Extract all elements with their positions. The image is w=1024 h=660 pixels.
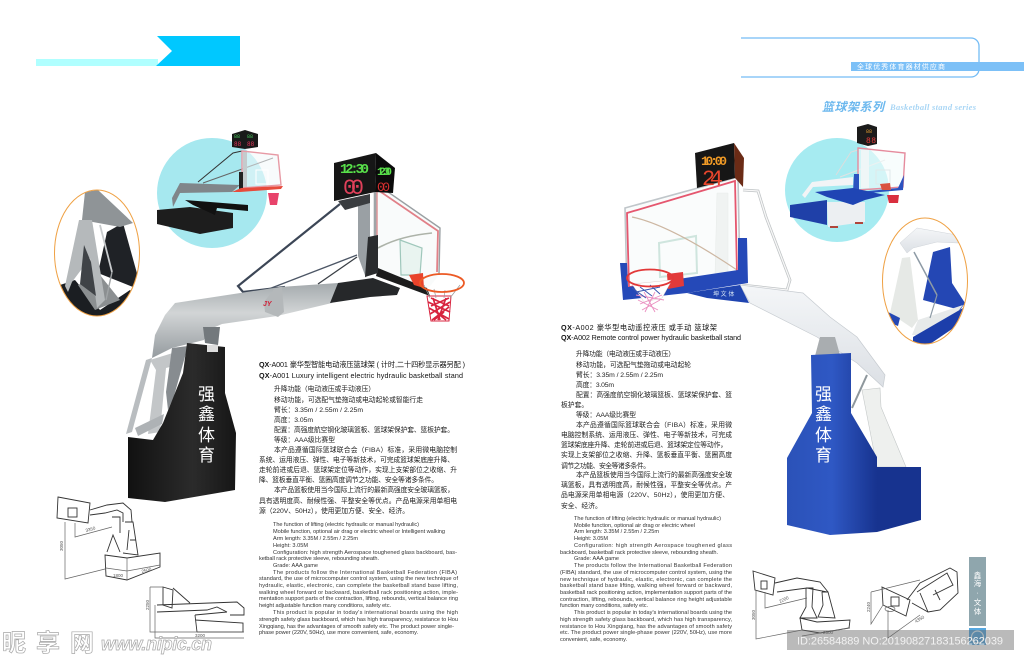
A001 Chinese description: 臂长：3.35m / 2.55m / 2.25m [274,405,363,414]
A002 English description: new technique of hydraulic, elastic, electronic, can complete the [560,577,732,583]
A001 English description: Height: 3.05M [273,543,308,549]
brand text on column [198,385,215,465]
backboard [625,177,740,293]
A001 English description: The function of lifting (electric hydraulic or manual hydraulic) [273,522,419,528]
product A001 text [258,360,465,636]
side tab [969,557,986,645]
inset: blue stand folded on cyan circle [785,124,905,242]
A001 Chinese description: 源（220V、50Hz），使用更加方便、安全、经济。 [259,506,409,515]
A002 English description: basketball stand base lifting, walking wheel forward or backward, [560,583,732,589]
A002 English description: Arm length: 3.35M / 2.55m / 2.25m [574,529,659,535]
blue wedge with text: 坤 文 体 [713,290,734,298]
scoreboard [695,143,744,192]
black cover [330,278,400,303]
A002 English description: The products follow the International Basketball Federation [574,563,732,569]
A002 English description: Configuration: high strength Aerospace toughened glass [574,543,732,549]
A001 Chinese description: 配置：高强度航空钢化玻璃篮板、篮球架保护套、篮板护套。 [274,425,454,434]
A001 Chinese description: 降、篮板垂直平衡、篮圈高度调节之功能、安全等诸多条件。 [259,475,438,484]
brand text on column: 育 [198,446,215,465]
A001 English description: phase power (220V, 50Hz), use more convenient, safe, economy. [259,630,418,636]
backboard [375,183,440,296]
brand text on column: 体 [198,426,215,445]
A001 English description: mentation support parts of the contraction, lifting, rebounds, vertical balance ring [259,596,458,602]
A001 English description: strength safety glass backboard, which has high transparency, resistance to Hou [259,617,458,623]
A001 English description: This product is popular in today's international boards using the high [273,610,458,616]
brand text on column: 体 [815,426,832,445]
header: rounded frame and slogan band [741,38,1024,77]
brand text on column: 鑫 [198,405,215,424]
A001 Chinese description: 升降功能（电动液压或手动液压） [274,384,375,393]
arm logo: JY [263,301,273,308]
hoop and net [409,273,464,321]
A002 Chinese description: 本产品遵循国际篮球联合会（FIBA）标准，采用微 [576,420,732,429]
scoreboard: 00 [377,180,390,195]
slogan text: 全球优秀体育器材供应商 [857,62,945,71]
technical drawing: blue stand perspective: 2200 [778,595,790,604]
hoop and net [627,270,684,312]
scoreboard: 12:30 [340,162,369,178]
A001 English description: Xingqiang, has the advantages of smooth safety etc. The product power single- [259,624,454,630]
A002 Chinese description: 璃篮板，具有透明度高，耐候性强，平整安全等优点。产 [561,480,732,489]
product A002 text [560,323,741,643]
A002 Chinese description: 等级：AAA级比赛型 [576,410,636,419]
A002 English description: This product is popular in today's international boards using the [574,610,732,616]
A001 Chinese description: 移动功能，可选配气垫拖动或电动起轮或智能行走 [274,395,423,404]
A001 titles: QX-A001 豪华型智能电动液压篮球架 ( 计时,二十四秒显示器另配 ) [259,360,465,369]
technical drawing: black stand perspective: 2500 [141,566,152,574]
A002 titles [561,323,741,342]
white post [715,193,728,275]
header: cyan arrow band [36,36,240,66]
inset: blue stand folded on cyan circle: 88 [866,137,876,146]
main product: black stand QX-A001 [126,153,464,502]
technical drawing: blue stand folded: 2240 [866,601,871,612]
scoreboard: 12:30 [377,167,392,179]
blue padded column [787,353,877,535]
technical drawing: blue stand perspective: 3050 [751,609,756,620]
brand text on column: 强 [815,385,832,404]
A001 English description: hydraulic, elastic, electronic, can complete the basketball stand base lifting, [259,583,458,589]
technical drawing: black stand perspective: 3050 [59,540,64,551]
series heading: Basketball stand series [889,102,977,112]
brand text on column: 强 [198,385,215,404]
A002 English description: The function of lifting (electric hydraulic or manual hydraulic) [574,516,721,522]
brand text on column [815,385,832,465]
A002 English description: contraction, lifting, rebounds, vertical balance ring height adjustable [560,597,732,603]
inset: black stand folded on cyan circle [157,130,283,248]
white frame [862,388,906,467]
scoreboard [334,153,395,210]
A002 Chinese description: 篮球架底座升降、走轮前进或后退、篮球架定位等动作， [561,440,727,449]
watermark: image id: ID:26584889 NO:20190827183156262039 [797,636,1003,648]
arm support [815,337,840,356]
technical drawing: blue stand folded: 4350 [914,614,926,624]
scoreboard: 24 [702,167,723,192]
technical drawing: black stand side view: 3200 [195,633,206,638]
technical drawing: blue stand perspective: 2500 [823,630,834,635]
A001 Chinese description: 高度：3.05m [274,415,313,424]
scoreboard: 10:00 [701,154,727,169]
white arm [740,285,885,387]
braces [238,204,432,292]
side tab: · [976,588,979,597]
A001 English description: The products follow the International Basketball Federation (FIBA) [273,570,457,576]
watermark: image id [787,630,1014,650]
watermark: site name [2,630,212,657]
main product: blue stand QX-A002 [620,143,921,535]
A002 Chinese description: 电脑控制系统、运用液压、弹性、电子等新技术，可完成 [561,430,732,439]
technical drawing: blue stand perspective [751,571,850,639]
A001 titles: QX-A001 Luxury intelligent electric hydraulic basketball stand [259,371,463,380]
A002 English description: high strength safety glass backboard, which has high transparency, [560,617,732,623]
A001 English description: walking wheel forward or backward, basketball rack positioning action, imple- [258,590,458,596]
A001 Chinese description: 本产品遵循国际篮球联合会（FIBA）标准，采用微电脑控制 [274,445,457,454]
side tab: 鑫 [974,570,982,580]
inset: blue stand folded on cyan circle: 88 [866,129,872,135]
A002 Chinese description: 安全、经济。 [561,501,602,510]
technical drawing: black stand side view: 2250 [145,599,150,610]
inset: black stand folded on cyan circle: 88 [234,141,242,148]
A001 titles [259,360,465,380]
brand text on column: 育 [815,446,832,465]
A001 English description [258,522,458,636]
side tab: 海 [974,578,982,588]
A002 Chinese description: 升降功能（电动液压或手动液压） [576,349,675,358]
A001 Chinese description: 等级：AAA级比赛型 [274,435,335,444]
A001 English description: Grade: AAA game [273,563,318,569]
scoreboard: 00 [343,176,364,201]
A002 Chinese description: 移动功能，可选配气垫拖动或电动起轮 [576,360,691,369]
A002 English description: basketball rack positioning action, implementation support parts of the [560,590,732,596]
A001 Chinese description: 本产品篮板使用当今国际上流行的最新高强度安全玻璃篮板， [274,485,454,494]
A002 English description: Grade: AAA game [574,556,619,562]
rear base [877,467,921,532]
A002 English description: Mobile function, optional air drag or electric wheel [574,523,695,529]
A001 English description: Configuration: high strength Aerospace toughened glass backboard, bas- [273,550,457,556]
technical drawing: black stand side view [145,587,244,638]
technical drawing: blue stand folded [866,568,958,638]
A002 English description: resistance to Hou Xingqiang, has the advantages of smooth safety [560,624,732,630]
A002 Chinese description: 配置：高强度航空钢化玻璃篮板、篮球架保护套、篮 [576,390,732,399]
blue wedge with text [687,285,749,303]
blue backboard pad [620,238,748,300]
A001 English description: height adjustable function many conditions, safety etc. [259,603,391,609]
brand text on column: 鑫 [815,405,832,424]
A002 English description: backboard, basketball rack protective sleeve, rebounding sheath. [560,550,718,556]
A002 Chinese description: 调节之功能、安全等诸多条件。 [561,461,650,470]
series heading: 篮球架系列 [822,100,886,114]
A002 English description: function many conditions, safety etc. [560,603,648,609]
inset: black stand folded on cyan circle: 88 [234,134,240,140]
A002 English description: Height: 3.05M [574,536,608,542]
A002 Chinese description: 臂长：3.35m / 2.55m / 2.25m [576,370,663,379]
A001 Chinese description: 系统、运用液压、弹性、电子等新技术，可完成篮球架底座升降、 [259,455,454,464]
side tab: 文 [974,597,982,607]
A002 Chinese description: 本产品篮板使用当今国际上流行的最新高强度安全玻 [576,470,732,479]
A001 Chinese description: 具有透明度高、耐候性强、平整安全等优点。产品电源采用单相电 [259,496,457,505]
black backboard pad [365,235,378,277]
A002 Chinese description: 高度：3.05m [576,380,614,389]
A002 Chinese description: 板护套。 [561,400,588,409]
inset: black stand folded on cyan circle: 88 [247,134,253,140]
inset: black stand base detail oval [54,190,140,320]
series heading [822,100,977,114]
A001 Chinese description [259,384,457,515]
A002 titles: QX-A002 Remote control power hydraulic basketball stand [561,333,741,342]
technical drawing: black stand perspective: 1800 [113,573,124,578]
A001 English description: standard, the use of microcomputer control system, using the new technique of [259,576,458,582]
vertical post [358,203,370,278]
A002 English description: convenient, safe, economy. [560,637,627,643]
A002 titles: QX-A002 豪华型电动遥控液压 或手动 篮球架 [561,323,717,332]
silver arm [152,283,338,358]
A002 Chinese description: 实现上支架部位之收缩、升降、篮板垂直平衡、篮圈高度 [561,450,732,459]
A002 English description: (FIBA) standard, the use of microcomputer control system, using the [560,570,732,576]
inset: blue stand base detail oval [882,218,968,344]
inset: black stand folded on cyan circle: 88 [247,141,255,148]
technical drawing: black stand perspective: 3350 [85,525,96,533]
A001 Chinese description: 走轮前进或后退、篮球架定位等动作，实现上支架部位之收缩、升 [259,465,457,474]
white tube brace [742,190,790,290]
frame legs [126,346,188,436]
A002 Chinese description: 品电源采用单相电源（220V、50Hz），使用更加方便、 [561,490,729,499]
side tab: 体 [974,606,982,616]
padded column and base [128,343,236,502]
watermark: site name: www.nipic.cn [101,634,212,654]
arm logo [263,287,284,317]
A002 Chinese description [561,349,732,510]
A002 English description [560,516,732,643]
technical drawing: black stand perspective [57,497,160,580]
watermark: site name: 昵享网 [2,630,94,657]
A001 English description: Arm length: 3.35M / 2.55m / 2.25m [273,536,358,542]
A001 English description: Mobile function, optional air drag or electric wheel or Intelligent walking [273,529,445,535]
A001 English description: ketball rack protective sleeve, rebounding sheath. [259,556,379,562]
A002 English description: etc. The product power single-phase power (220V, 50Hz), use more [560,630,732,636]
